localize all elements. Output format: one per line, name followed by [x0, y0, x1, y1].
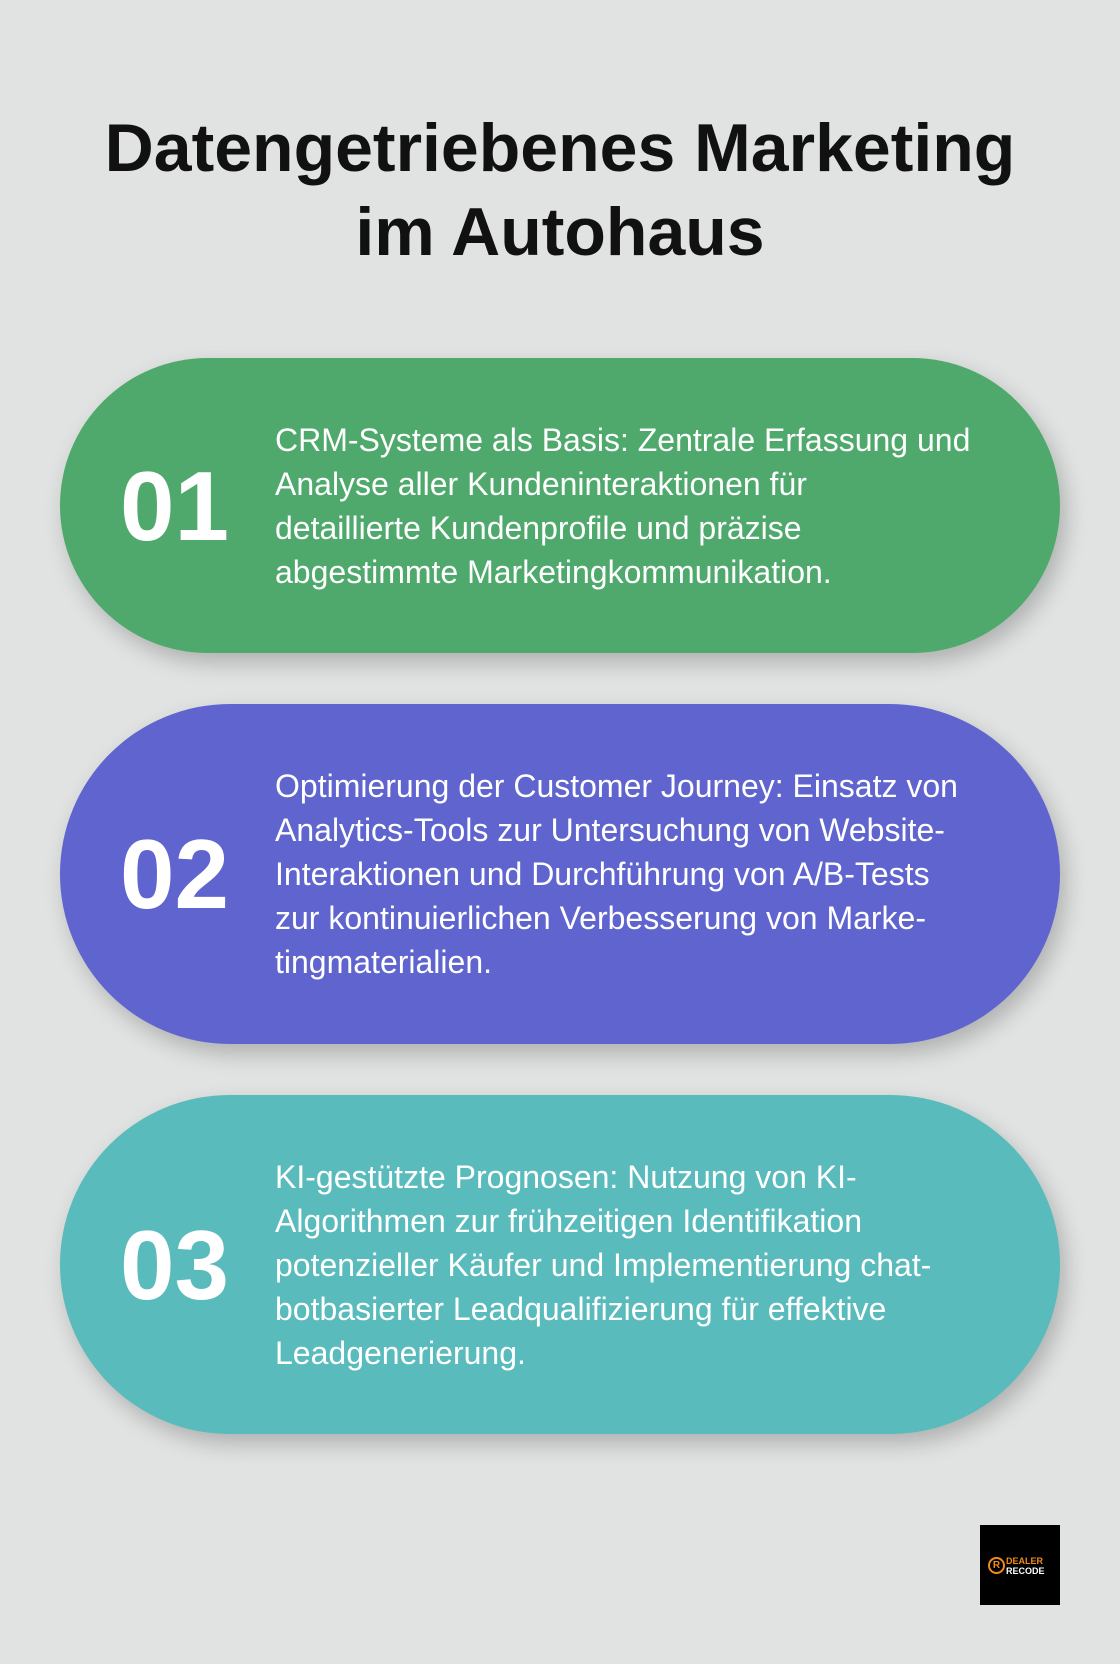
- panel: 03 KI: [60, 1095, 1060, 1434]
- text 02: [275, 768, 958, 980]
- title: im Autohaus: [355, 194, 765, 270]
- text 02: tingmaterialien.: [275, 944, 492, 980]
- title: Datengetriebenes Marketing: [105, 110, 1015, 186]
- text 03: Algorithmen zur frühzeitigen Identifikation: [275, 1203, 862, 1239]
- icon: R circle: [988, 1557, 1005, 1574]
- logo text: DEALER: [1006, 1556, 1043, 1566]
- panel: 02 Customer Journey: [60, 704, 1060, 1044]
- title: [105, 110, 1015, 270]
- text 02: Interaktionen und Durchführung von A/B-Tests: [275, 856, 930, 892]
- text 03: Leadgenerierung.: [275, 1335, 526, 1371]
- text 03: botbasierter Leadqualifizierung für effektive: [275, 1291, 886, 1327]
- text 02: Analytics-Tools zur Untersuchung von Website-: [275, 812, 945, 848]
- text 01: detaillierte Kundenprofile und präzise: [275, 510, 802, 546]
- text 03: potenzieller Käufer und Implementierung chat-: [275, 1247, 931, 1283]
- icon: R circle: R: [993, 1560, 1000, 1571]
- text 03: KI-gestützte Prognosen: Nutzung von KI-: [275, 1159, 857, 1195]
- text 01: Analyse aller Kundeninteraktionen für: [275, 466, 807, 502]
- number 01: 01: [120, 451, 229, 561]
- text 01: abgestimmte Marketingkommunikation.: [275, 554, 832, 590]
- logo text: RECODE: [1006, 1566, 1045, 1576]
- text 02: zur kontinuierlichen Verbesserung von Marke-: [275, 900, 926, 936]
- text 02: Optimierung der Customer Journey: Einsatz von: [275, 768, 958, 804]
- text 03: [275, 1159, 931, 1371]
- logo text: [1006, 1556, 1045, 1576]
- number 02: 02: [120, 819, 229, 929]
- text 01: [275, 422, 970, 590]
- number 03: 03: [120, 1210, 229, 1320]
- logo: [980, 1525, 1060, 1605]
- text 01: CRM-Systeme als Basis: Zentrale Erfassung und: [275, 422, 970, 458]
- panel: 01 CRM: [60, 358, 1060, 653]
